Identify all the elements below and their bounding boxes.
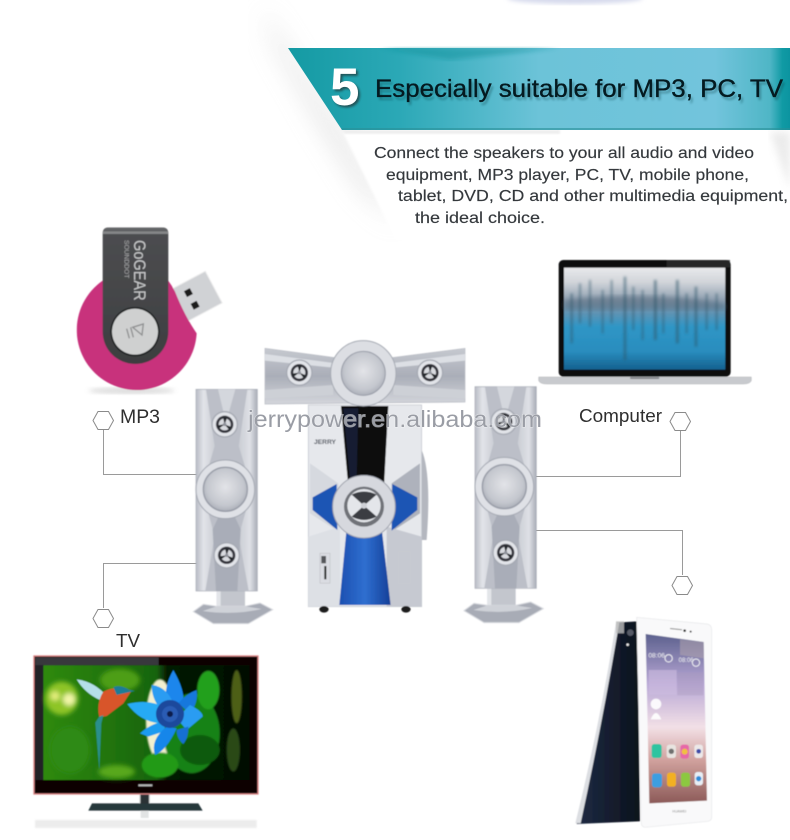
status widgets: 08:06 (679, 658, 694, 664)
brand text: GoGEAR (130, 240, 149, 301)
subwoofer cabinet (308, 405, 428, 613)
foliage behind flower (142, 670, 242, 778)
icon: computer hexagon marker (670, 412, 690, 430)
icon: phone hexagon marker (672, 576, 692, 594)
status widgets (648, 652, 703, 719)
label: Computer: Computer (579, 406, 662, 426)
glossy black panel (341, 406, 388, 487)
phone illustration: HUAWEI (672, 809, 686, 813)
description text block: Connect the speakers to your all audio and video (374, 145, 754, 162)
feet (319, 606, 329, 613)
section header banner: 5 (330, 58, 359, 117)
USB and card slot (320, 553, 330, 583)
heading: Especially suitable for MP3, PC, TV (375, 75, 783, 103)
MP3 player illustration: SOUNDDOT (122, 240, 128, 279)
status widgets: 08:06 (648, 652, 665, 659)
trees in the screen (572, 277, 717, 360)
MP3 player illustration (77, 227, 222, 394)
top edge glow (507, 0, 643, 4)
brand logo: JERRY (314, 440, 336, 446)
blue flower (127, 670, 203, 755)
dark clip (103, 227, 168, 364)
laptop illustration (539, 260, 751, 384)
treeline haze (564, 296, 725, 310)
fold shadow (262, 5, 398, 226)
laptop base (539, 377, 751, 384)
description text block (374, 145, 788, 227)
round button (110, 307, 160, 356)
icon: TV hexagon marker (93, 610, 114, 628)
label: TV: TV (116, 631, 140, 651)
TV illustration (34, 656, 258, 828)
main driver (333, 475, 395, 538)
app icons (652, 744, 662, 758)
TV frame (34, 656, 258, 794)
TV screen (43, 665, 249, 780)
hummingbird (77, 679, 135, 770)
left tower speaker (193, 389, 273, 624)
blue lower panel (339, 528, 391, 605)
centre speaker (265, 341, 465, 406)
phone back (577, 621, 640, 824)
TV floor reflection (35, 820, 257, 828)
teal banner (288, 48, 790, 130)
blue button panels (313, 484, 337, 530)
description text block: tablet, DVD, CD and other multimedia equipment, (398, 188, 788, 205)
phone front (637, 617, 712, 827)
right tower speaker (464, 387, 543, 623)
label: MP3: MP3 (120, 407, 160, 428)
watermark: jerrypower.en.alibaba.com (247, 406, 542, 432)
connector lines (104, 430, 682, 608)
speaker system (193, 341, 543, 624)
pink disc (77, 279, 197, 390)
TV stand (140, 793, 149, 805)
USB plug (166, 271, 222, 324)
watermark: jerrypower.en.alibaba.com (247, 406, 542, 432)
step number 5: 5 (332, 60, 361, 119)
phone screen (646, 634, 707, 803)
section header banner (262, 5, 790, 240)
description text block: the ideal choice. (415, 210, 545, 227)
heading: Especially suitable for MP3, PC, TV (377, 78, 785, 106)
icon: MP3 hexagon marker (93, 412, 114, 430)
description text block: equipment, MP3 player, PC, TV, mobile phone, (386, 167, 749, 184)
phone illustration (575, 617, 712, 827)
under-banner white panel (342, 130, 790, 240)
